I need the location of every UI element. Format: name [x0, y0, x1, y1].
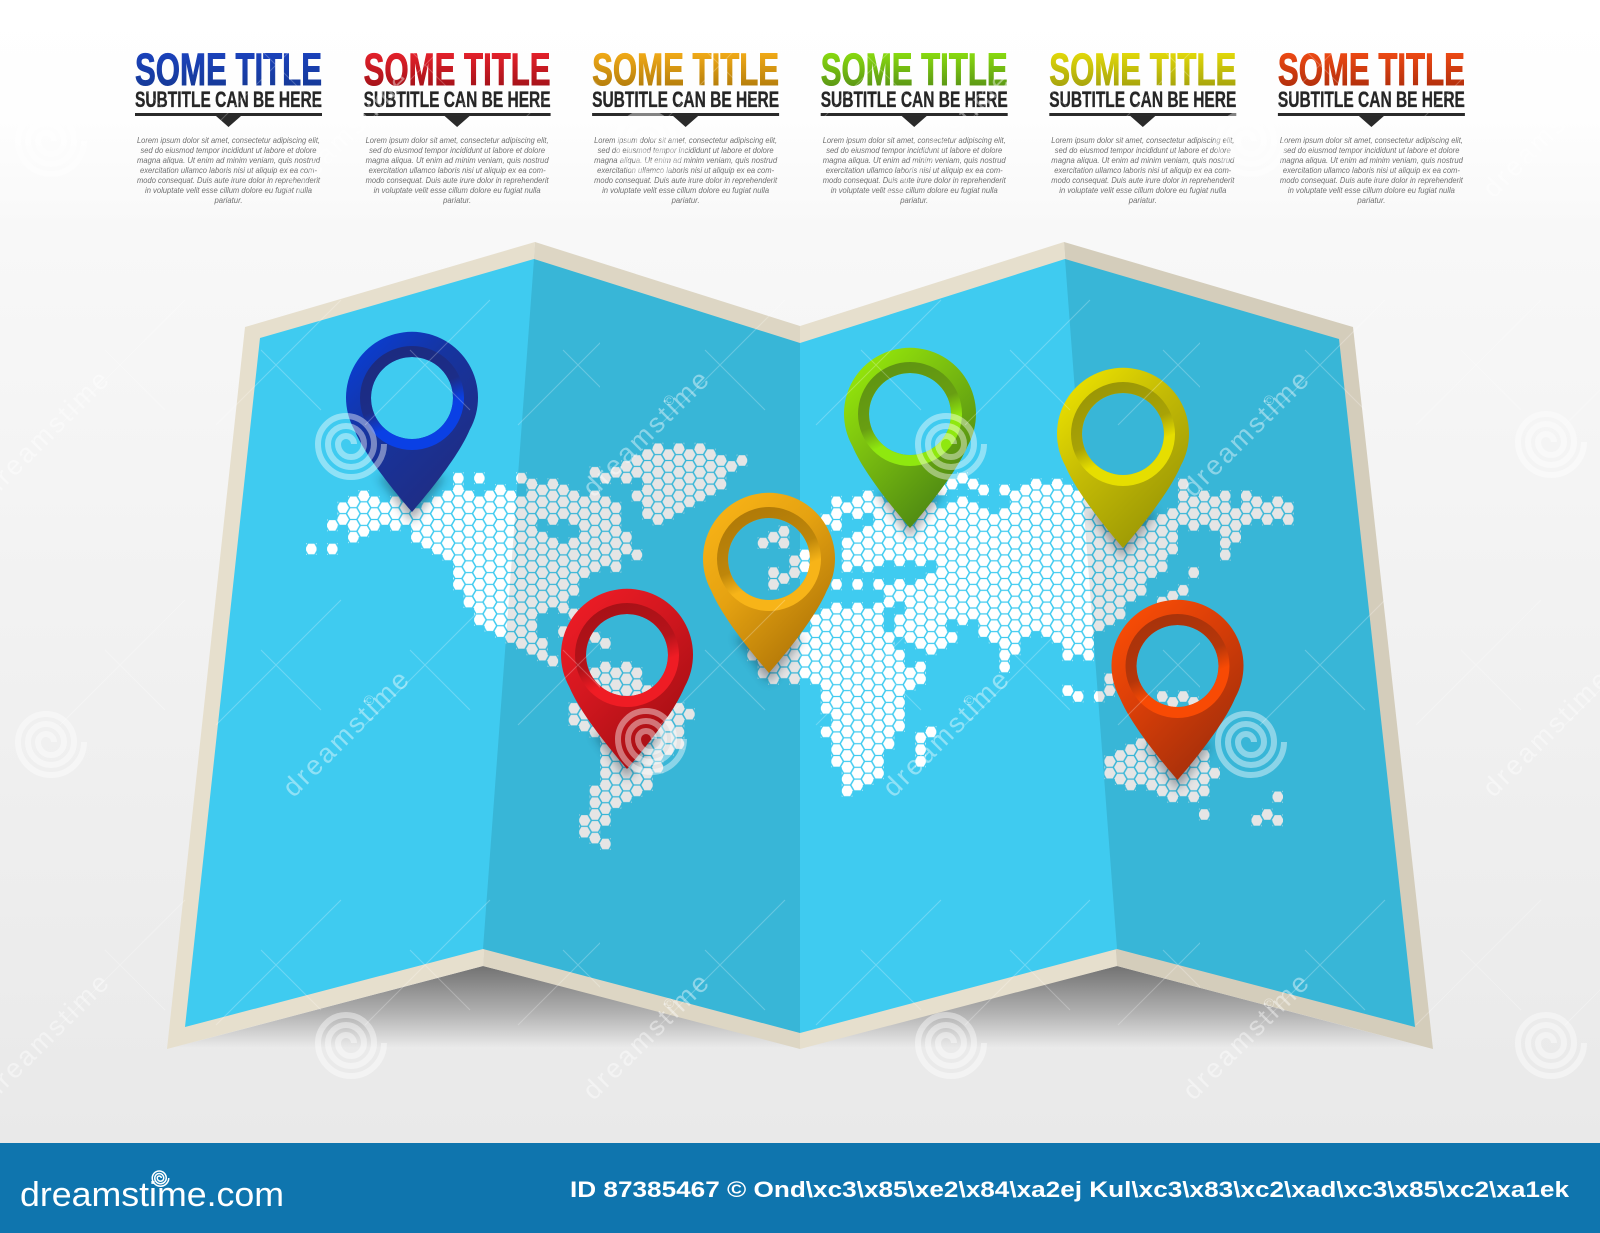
watermark: dreamstime text: dreamstime: [877, 66, 1015, 204]
divider with pointer: green column: [821, 113, 1008, 127]
title: yellow: SOME TITLE: [1049, 44, 1236, 95]
body text: green column: pariatur.: [899, 195, 928, 205]
map paper border: [167, 242, 1433, 1049]
body text: orange column: modo consequat. Duis aute irure dolor in reprehenderit: [1280, 175, 1463, 185]
folded map: [167, 242, 1433, 1049]
body text: red column: in voluptate velit esse cillum dolore eu fugiat nulla: [374, 185, 541, 195]
body text: red column: magna aliqua. Ut enim ad minim veniam, quis nostrud: [366, 155, 549, 165]
body text: yellow column: modo consequat. Duis aute irure dolor in reprehenderit: [1051, 175, 1235, 185]
footer logo text: dreamstime.com: [20, 1176, 284, 1214]
body text: orange column: in voluptate velit esse cillum dolore eu fugiat nulla: [1288, 185, 1455, 195]
body text: green column: modo consequat. Duis aute irure dolor in reprehenderit: [823, 175, 1006, 185]
watermark: dreamstime text: ©: [364, 692, 375, 708]
header column: blue: [135, 44, 322, 205]
body text: green column: in voluptate velit esse cillum dolore eu fugiat nulla: [831, 185, 998, 195]
body text: amber column: magna aliqua. Ut enim ad minim veniam, quis nostrud: [594, 155, 777, 165]
divider with pointer: orange column: [1278, 113, 1465, 127]
body text: blue column: magna aliqua. Ut enim ad minim veniam, quis nostrud: [137, 155, 320, 165]
body text: green column: magna aliqua. Ut enim ad minim veniam, quis nostrud: [823, 155, 1006, 165]
header column: amber: [592, 44, 779, 205]
watermark: dreamstime text: dreamstime: [577, 365, 715, 503]
subtitle: yellow column: SUBTITLE CAN BE HERE: [1049, 87, 1236, 112]
watermark: dreamstime text: ©: [664, 392, 675, 408]
pin: red: [561, 589, 693, 779]
body text: orange column: [1280, 135, 1463, 205]
body text: amber column: sed do eiusmod tempor incididunt ut labore et dolore: [598, 145, 774, 155]
body text: amber column: Lorem ipsum dolor sit amet, consectetur adipiscing elit,: [594, 135, 777, 145]
body text: green column: exercitation ullamco laboris nisi ut aliquip ex ea com-: [826, 165, 1003, 175]
pin: blue: [346, 332, 478, 522]
subtitle: green column: SUBTITLE CAN BE HERE: [821, 87, 1008, 112]
hexagon world map: [300, 430, 1300, 860]
body text: blue column: exercitation ullamco laboris nisi ut aliquip ex ea com-: [140, 165, 317, 175]
map blue surface: [185, 259, 1415, 1033]
watermark: dreamstime text: dreamstime: [1177, 968, 1315, 1106]
title: red: SOME TITLE: [364, 44, 551, 95]
body text: orange column: exercitation ullamco laboris nisi ut aliquip ex ea com-: [1283, 165, 1460, 175]
body text: yellow column: Lorem ipsum dolor sit amet, consectetur adipiscing elit,: [1051, 135, 1234, 145]
watermark: dreamstime text: ©: [964, 692, 975, 708]
body text: blue column: [137, 135, 321, 205]
body text: red column: modo consequat. Duis aute irure dolor in reprehenderit: [366, 175, 549, 185]
footer banner: [0, 1143, 1600, 1233]
pin: amber: [703, 493, 835, 683]
subtitle: blue column: SUBTITLE CAN BE HERE: [135, 87, 322, 112]
title: orange: SOME TITLE: [1278, 44, 1465, 95]
title: green: SOME TITLE: [821, 44, 1008, 95]
watermark: dreamstime text: dreamstime: [277, 66, 415, 204]
footer logo spiral icon: [152, 1171, 169, 1186]
subtitle: red column: SUBTITLE CAN BE HERE: [364, 87, 551, 112]
divider with pointer: blue column: [135, 113, 322, 127]
pin: yellow: [1057, 368, 1189, 558]
body text: orange column: Lorem ipsum dolor sit amet, consectetur adipiscing elit,: [1280, 135, 1463, 145]
watermark: dreamstime text: dreamstime: [1177, 365, 1315, 503]
body text: green column: sed do eiusmod tempor incididunt ut labore et dolore: [826, 145, 1002, 155]
title: amber: SOME TITLE: [592, 44, 779, 95]
body text: amber column: [594, 135, 778, 205]
header column: yellow: [1049, 44, 1236, 205]
body text: green column: Lorem ipsum dolor sit amet, consectetur adipiscing elit,: [823, 135, 1006, 145]
shaded map folds: [483, 259, 1415, 1033]
title: blue: SOME TITLE: [135, 44, 322, 95]
body text: orange column: magna aliqua. Ut enim ad minim veniam, quis nostrud: [1280, 155, 1463, 165]
body text: orange column: sed do eiusmod tempor incididunt ut labore et dolore: [1283, 145, 1460, 155]
watermark: dreamstime text: dreamstime: [877, 665, 1015, 803]
body text: amber column: modo consequat. Duis aute irure dolor in reprehenderit: [594, 175, 778, 185]
subtitle: amber column: SUBTITLE CAN BE HERE: [592, 87, 779, 112]
pin: orange: [1112, 600, 1244, 790]
watermark: dreamstime text: ©: [664, 995, 675, 1011]
header column: green: [821, 44, 1008, 205]
header column: red: [364, 44, 551, 205]
body text: blue column: sed do eiusmod tempor incididunt ut labore et dolore: [140, 145, 317, 155]
divider with pointer: yellow column: [1049, 113, 1236, 127]
body text: red column: [366, 135, 549, 205]
footer image credit: ID 87385467 © Ond\xc3\x85\xe2\x84\xa2ej Kul\xc3\x83\xc2\xad\xc3\x85\xc2\xa1ek: [570, 1177, 1570, 1202]
watermark: spirals: [18, 113, 1584, 1076]
divider with pointer: amber column: [592, 113, 779, 127]
body text: yellow column: magna aliqua. Ut enim ad minim veniam, quis nostrud: [1051, 155, 1235, 165]
body text: amber column: in voluptate velit esse cillum dolore eu fugiat nulla: [602, 185, 769, 195]
body text: yellow column: in voluptate velit esse cillum dolore eu fugiat nulla: [1059, 185, 1227, 195]
header column: orange: [1278, 44, 1465, 205]
body text: green column: [823, 135, 1006, 205]
body text: yellow column: pariatur.: [1128, 195, 1157, 205]
body text: amber column: pariatur.: [671, 195, 700, 205]
watermark: dreamstime text: ©: [1264, 995, 1275, 1011]
body text: blue column: modo consequat. Duis aute irure dolor in reprehenderit: [137, 175, 321, 185]
watermark: dreamstime text: ©: [1264, 392, 1275, 408]
subtitle: orange column: SUBTITLE CAN BE HERE: [1278, 87, 1465, 112]
watermark: dreamstime text: dreamstime: [577, 968, 715, 1106]
body text: amber column: exercitation ullamco laboris nisi ut aliquip ex ea com-: [597, 165, 774, 175]
pin: green: [844, 348, 976, 538]
body text: orange column: pariatur.: [1356, 195, 1385, 205]
map fold shadows: [175, 966, 1425, 1047]
body text: blue column: in voluptate velit esse cillum dolore eu fugiat nulla: [145, 185, 312, 195]
body text: yellow column: sed do eiusmod tempor incididunt ut labore et dolore: [1055, 145, 1231, 155]
body text: yellow column: [1051, 135, 1235, 205]
body text: red column: sed do eiusmod tempor incididunt ut labore et dolore: [369, 145, 545, 155]
divider with pointer: red column: [364, 113, 551, 127]
body text: red column: pariatur.: [442, 195, 471, 205]
body text: red column: Lorem ipsum dolor sit amet, consectetur adipiscing elit,: [366, 135, 549, 145]
body text: blue column: pariatur.: [214, 195, 242, 205]
body text: blue column: Lorem ipsum dolor sit amet, consectetur adipiscing elit,: [137, 135, 320, 145]
watermark: dreamstime text: dreamstime: [277, 665, 415, 803]
body text: red column: exercitation ullamco laboris nisi ut aliquip ex ea com-: [369, 165, 546, 175]
body text: yellow column: exercitation ullamco laboris nisi ut aliquip ex ea com-: [1054, 165, 1231, 175]
